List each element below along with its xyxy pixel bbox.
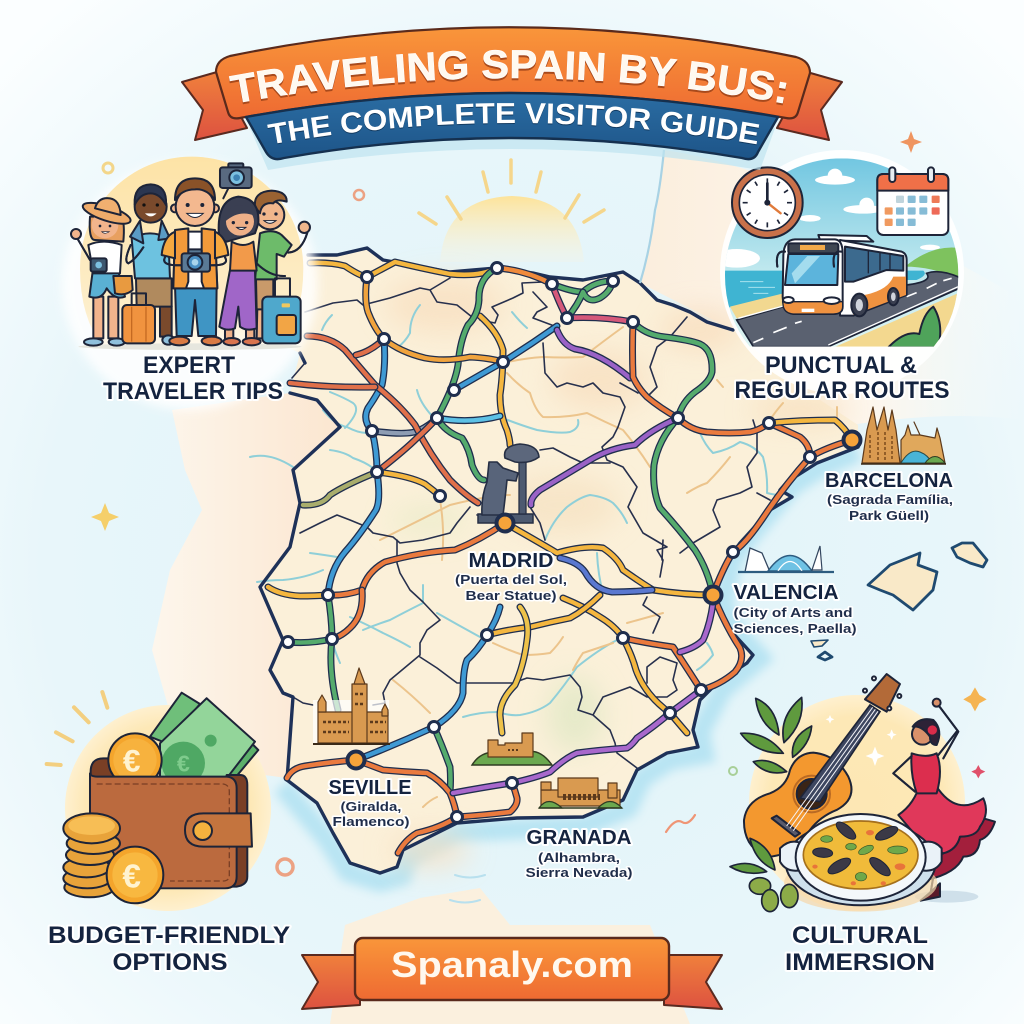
decorative sparkle left [91, 503, 119, 531]
halo behind travelers [62, 160, 318, 410]
heading: cultural immersion: CULTURAL [792, 922, 928, 949]
label: Seville: (Giralda, [340, 799, 402, 814]
halo [720, 150, 964, 394]
sparkle [971, 765, 985, 778]
label: Madrid: (Puerta del Sol, [455, 572, 567, 587]
icon: orange suitcase [122, 293, 155, 343]
land: Balearic islands [811, 543, 987, 660]
decorative sparkle right [900, 131, 922, 153]
blue banner [246, 93, 778, 159]
ribbon tail left [182, 72, 247, 140]
title text [228, 50, 786, 146]
icon: Seville cathedral and Giralda [313, 668, 390, 744]
label: Madrid [455, 550, 567, 603]
rivers [250, 305, 780, 717]
province borders [292, 278, 770, 768]
icon: clock [732, 167, 803, 238]
city labels [328, 470, 953, 880]
label: Granada: Sierra Nevada) [526, 865, 632, 880]
heading: expert traveler tips: TRAVELER TIPS [103, 378, 283, 405]
bus routes [268, 262, 852, 853]
label: Barcelona: BARCELONA [825, 470, 953, 492]
icon: coin on wallet [91, 733, 162, 787]
panel: expert traveler tips [62, 157, 318, 410]
title text: THE COMPLETE VISITOR GUIDE [267, 103, 760, 146]
orange banner [216, 27, 810, 118]
Valencia hub [704, 586, 722, 604]
icon: olive branch [741, 697, 812, 773]
terrain shading [385, 277, 850, 868]
icon: large coin: € [122, 858, 141, 895]
panel: budget-friendly options [47, 692, 290, 976]
label: Madrid: MADRID [468, 550, 554, 572]
heading: punctual and regular routes: REGULAR ROUTES [734, 377, 950, 404]
icon: coin on wallet: € [123, 743, 141, 779]
coastal shallow water [282, 452, 858, 882]
white sparkles [826, 715, 897, 766]
title text: TRAVELING SPAIN BY BUS: [228, 50, 786, 106]
label: Granada [526, 827, 632, 880]
label: Seville: Flamenco) [332, 814, 410, 829]
icon: teal suitcase [262, 278, 301, 343]
yellow backdrop [749, 695, 965, 911]
label: Valencia: Sciences, Paella) [734, 621, 856, 636]
traveler: man in blue shirt [126, 184, 174, 345]
label: Valencia: (City of Arts and [734, 605, 853, 620]
icon: camera [220, 163, 252, 198]
icon: wallet [90, 773, 252, 888]
banner drop shadow [250, 105, 775, 170]
scene illustration [725, 158, 958, 347]
coastline [260, 248, 858, 873]
label: Madrid: Bear Statue) [466, 588, 556, 603]
orange plate [355, 938, 669, 1000]
sun [419, 160, 604, 262]
label: Barcelona: Park Güell) [849, 508, 929, 523]
heading: budget-friendly options [48, 922, 290, 976]
icon: Alhambra fortress [472, 733, 552, 765]
land: Portugal [152, 393, 340, 778]
label: Valencia: VALENCIA [734, 582, 838, 604]
Seville hub [348, 752, 364, 768]
panel: punctual and regular routes [713, 150, 970, 404]
traveler: woman with hat [71, 198, 133, 346]
footer banner [302, 938, 722, 1009]
heading: cultural immersion [785, 922, 935, 976]
heading: budget-friendly options: OPTIONS [112, 949, 228, 976]
heading: expert traveler tips [103, 352, 283, 405]
icon: Sagrada Familia and Park Guell [861, 407, 946, 464]
label: Barcelona: (Sagrada Família, [827, 492, 953, 507]
traveler illustration [71, 157, 310, 350]
heading: punctual and regular routes [734, 352, 950, 404]
ribbon tail right [777, 72, 842, 140]
icon: paella dish [780, 814, 942, 912]
traveler: central man with camera [162, 178, 228, 345]
yellow backdrop [65, 705, 271, 911]
heading: budget-friendly options: BUDGET-FRIENDLY [48, 922, 290, 949]
wallet illustration [47, 692, 258, 903]
pale roads [380, 327, 837, 807]
panel: cultural immersion [730, 674, 995, 976]
title banner [181, 26, 843, 170]
sparkles [963, 687, 987, 711]
Madrid hub [496, 514, 514, 532]
icon: olives and leaves [730, 838, 798, 912]
ribbon tail right [664, 955, 722, 1009]
culture illustration [730, 674, 995, 912]
icon: coin stack [63, 813, 120, 897]
icon: calendar [877, 167, 948, 235]
land: France [640, 150, 1024, 425]
heading: punctual and regular routes: PUNCTUAL & [765, 352, 917, 379]
ground shadow [78, 343, 302, 350]
icon: Madrid bear statue [478, 444, 539, 523]
land: North Africa [330, 888, 690, 1024]
footer text: Spanaly.com [391, 944, 633, 985]
label: Granada: (Alhambra, [538, 850, 620, 865]
label: Seville: SEVILLE [328, 777, 412, 799]
France coast line [640, 150, 664, 283]
traveler: man in green shirt [255, 191, 310, 338]
label: Barcelona [825, 470, 953, 523]
heading: expert traveler tips: EXPERT [143, 352, 235, 379]
ribbon tail left [302, 955, 360, 1009]
icon: banknotes: € [177, 751, 190, 777]
route stops [282, 262, 816, 822]
icon: banknotes [150, 693, 258, 785]
rays [47, 692, 107, 765]
label: Granada: GRANADA [526, 827, 632, 849]
decorative rings and squiggle [103, 163, 737, 902]
Barcelona hub [844, 432, 860, 448]
icon: guitar [744, 674, 901, 857]
icon: large coin [107, 847, 163, 903]
label: Seville [328, 777, 412, 829]
heading: cultural immersion: IMMERSION [785, 949, 935, 976]
icon: Granada castle [539, 778, 622, 808]
icon: bus [777, 235, 907, 316]
traveler: woman in purple trousers [219, 197, 285, 345]
icon: flamenco dancer [893, 699, 995, 903]
label: Valencia [734, 582, 856, 636]
icon: City of Arts and Sciences [738, 546, 834, 572]
land: Spain [260, 248, 858, 873]
scene: sky, sea and road [725, 158, 958, 347]
yellow backdrop [80, 157, 303, 348]
